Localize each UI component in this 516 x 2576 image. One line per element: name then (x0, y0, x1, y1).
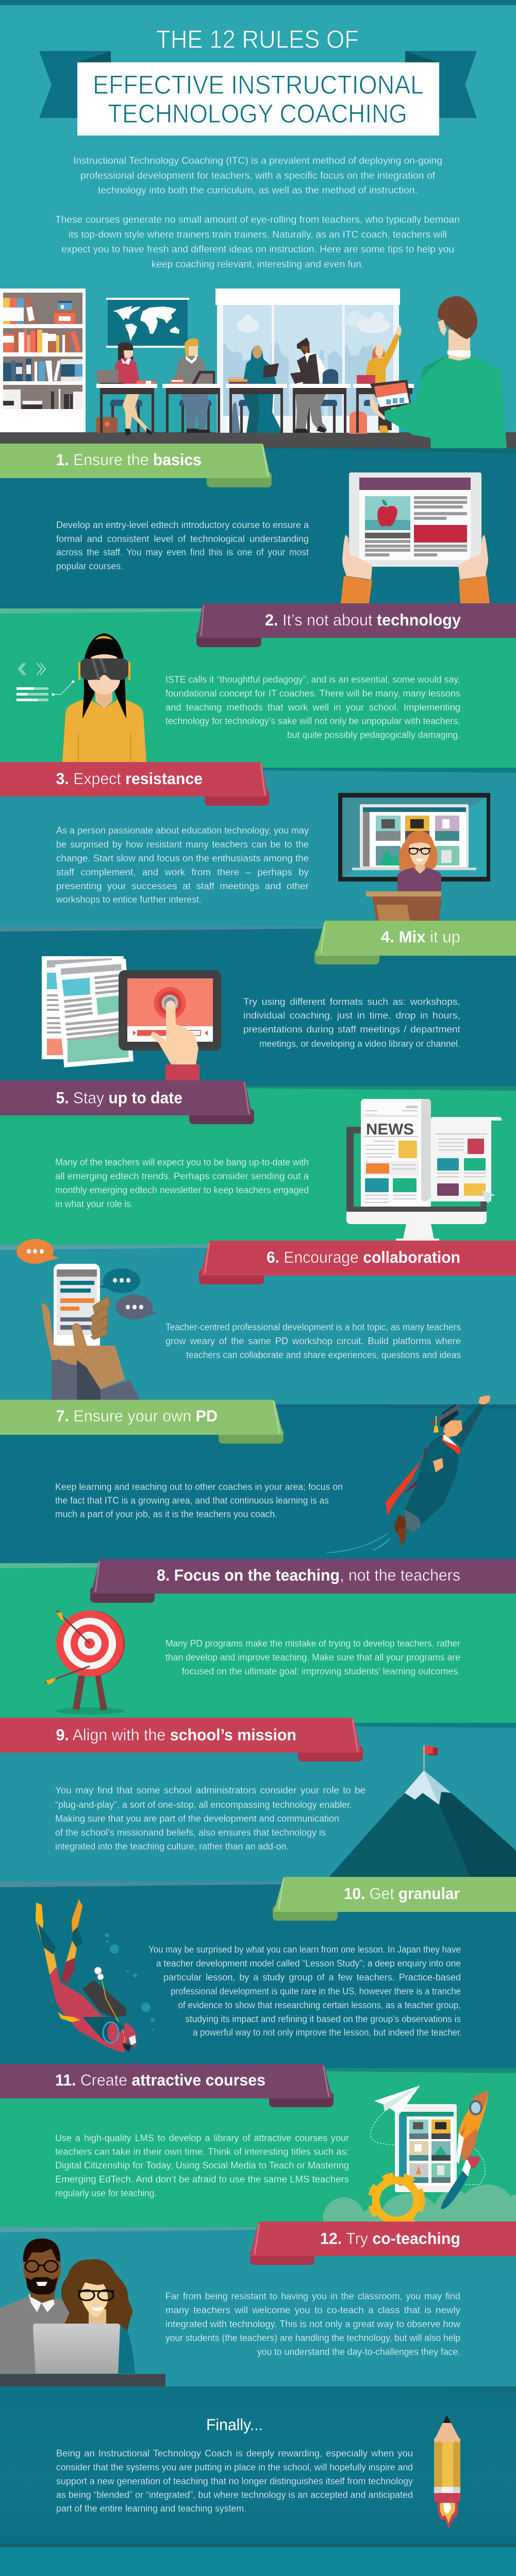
panel: finally (0, 2386, 516, 2544)
ribbon banner with main title (39, 51, 477, 135)
panel: rule 8 (0, 1559, 516, 1728)
body text: Use a high-quality LMS to develop a library of attractive courses your (55, 2133, 349, 2143)
chat bubble grey (115, 1295, 157, 1319)
body text: Emerging EdTech. And don’t be afraid to use the same LMS teachers (55, 2174, 349, 2184)
woman (61, 2259, 135, 2374)
ribbon heading: 11. create attractive courses: 11. Create attractive courses (55, 2071, 265, 2089)
body text: presenting your successes at staff meetings and other (56, 881, 309, 891)
body text: the fact that ITC is a growing area, and that continuous learning is as (55, 1495, 329, 1505)
panel: rule 4 (0, 921, 516, 1092)
body text: and teaching methods that work well in your school. Implementing (165, 702, 460, 713)
illustration: archery target with arrows (45, 1611, 125, 1715)
intro text: technology into both the curriculum, as well as the method of instruction. (98, 185, 418, 196)
intro text: Instructional Technology Coaching (ITC) is a prevalent method of deploying on-going (73, 156, 442, 166)
body text: formal and consistent level of technological understanding (56, 534, 309, 544)
illustration: mountain with flag (329, 1745, 516, 1877)
ribbon banner with main title: TECHNOLOGY COACHING (108, 99, 407, 128)
person: man with tablet (171, 338, 215, 384)
illustration: flying graduate in cape (327, 1396, 490, 1553)
man (0, 2239, 72, 2374)
body text (165, 2291, 461, 2357)
panel: rule 3 (0, 762, 516, 933)
person: student raising hand (357, 325, 402, 384)
body text: grow weary of the same PD workshop circuit. Build platforms where (165, 1336, 461, 1346)
body text: of the school’s missionand beliefs, also ensures that technology is (55, 1827, 326, 1838)
ribbon banner with main title: EFFECTIVE INSTRUCTIONAL (93, 70, 424, 99)
heading: finally: Finally... (206, 2415, 263, 2434)
body text: You may find that some school administrators consider your role to be (55, 1785, 365, 1795)
ribbon heading: 8. focus on the teaching: 8. Focus on the teaching, not the teachers (157, 1566, 460, 1584)
illustration: scuba diver with bubbles (36, 1899, 155, 2053)
body text: “plug-and-play”, a sort of one-stop, all encompassing technology enabler. (55, 1800, 352, 1810)
body text: Many PD programs make the mistake of trying to develop teachers, rather (165, 1638, 460, 1649)
panel: rule 10 (0, 1877, 516, 2073)
body text: popular courses. (56, 561, 123, 571)
body text: a powerful way to not only improve the lesson, but indeed the teacher. (193, 2027, 462, 2038)
body text: Keep learning and reaching out to other coaches in your area; focus on (55, 1482, 343, 1492)
ribbon heading: 2. it's not about technology (196, 603, 516, 647)
intro text (55, 156, 460, 270)
laptop (33, 2324, 120, 2374)
body text: change. Start slow and focus on the enthusiasts among the (56, 853, 309, 863)
body text: across the staff. You may even find this is one of your most (56, 547, 309, 557)
illustration: video tablet and documents (42, 956, 221, 1080)
ribbon heading: 3. expect resistance: 3. Expect resistance (56, 769, 203, 788)
ribbon heading: 11. create attractive courses (0, 2064, 334, 2107)
body text: Making sure that you are part of the development and communication (55, 1814, 339, 1824)
body text (55, 2133, 349, 2198)
ribbon heading: 5. stay up to date: 5. Stay up to date (56, 1088, 182, 1107)
panel: intro header (0, 0, 516, 448)
ribbon heading: 6. encourage collaboration (199, 1241, 516, 1284)
body text: integrated with technology. This is not only a great way to observe how (165, 2319, 461, 2329)
intro text: These courses generate no small amount of eye-rolling from teachers, who typically bemoan (55, 214, 460, 226)
body text: professional development is quite rare in the US, however there is a tranche (171, 1986, 461, 1996)
body text: Many of the teachers will expect you to be bang up-to-date with (55, 1157, 309, 1167)
panel: footer (0, 2544, 516, 2576)
body text: you to understand the day-to-challenges they face. (257, 2347, 460, 2357)
body text: workshops to entice further interest. (56, 894, 202, 905)
body text: Far from being resistant to having you in the classroom, you may find (165, 2291, 460, 2301)
body text (243, 996, 460, 1049)
body text: meetings, or developing a video library or channel. (259, 1039, 460, 1049)
window with skyline (215, 289, 400, 433)
body text (55, 1482, 343, 1519)
body text: teachers can collaborate and share experiences, questions and ideas (186, 1350, 461, 1360)
gear (370, 2175, 423, 2226)
body text: in what your role is. (55, 1199, 134, 1209)
body text: Try using different formats such as: workshops, (243, 996, 460, 1007)
body text: much a part of your job, as it is the teachers you coach. (55, 1509, 277, 1519)
body text: Develop an entry-level edtech introductory course to ensure a (56, 520, 309, 530)
ribbon heading: 12. try co-teaching: 12. Try co-teaching (320, 2229, 460, 2247)
body text: but quite possibly pedagogically damaging. (287, 730, 460, 740)
course tablet (395, 2104, 457, 2192)
body text: teachers can take in their own time. Think of interesting titles such as: (55, 2146, 349, 2157)
body text (56, 825, 309, 905)
coach with tablet (370, 296, 507, 448)
illustration: newspaper on monitor (346, 1099, 502, 1241)
body text: many teachers will welcome you to co-teach a class that is newly (165, 2305, 460, 2315)
ribbon heading: 4. mix it up: 4. Mix it up (381, 927, 460, 946)
clouds (323, 2184, 516, 2241)
ribbon heading: 1. ensure the basics (0, 444, 272, 487)
body text: support a new generation of teaching that no longer distinguishes itself from technology (56, 2476, 413, 2486)
body text: regularly use for teaching. (55, 2188, 157, 2198)
body text: studying its impact and refining it based on the group’s observations is (186, 2014, 461, 2024)
ribbon heading: 4. mix it up (314, 921, 516, 964)
body text: particular lesson, by a study group of a few teachers. Practice-based (163, 1972, 461, 1982)
panel: rule 11 (0, 2064, 516, 2241)
panel: rule 2 (0, 603, 516, 773)
illustration: newspaper on monitor: NEWS (366, 1120, 414, 1138)
body text: of evidence to show that researching certain lessons, as a teacher group, (178, 2000, 461, 2010)
person: woman in hijab (228, 345, 279, 384)
body text (55, 1785, 365, 1852)
body text (165, 1638, 460, 1676)
panel: rule 7 (0, 1396, 516, 1569)
body text (55, 1157, 309, 1209)
ribbon heading: 10. get granular: 10. Get granular (344, 1884, 460, 1903)
body text (56, 2448, 413, 2514)
panel: rule 5 (0, 1080, 516, 1251)
body text: than develop and improve teaching. Make sure that all your programs are (165, 1652, 460, 1663)
body text: monthly emerging edtech newsletter to keep teachers engaged (55, 1185, 309, 1195)
illustration: classroom (0, 289, 516, 448)
body text: Teacher-centred professional development is a hot topic, as many teachers (165, 1322, 461, 1332)
body text: integrated into the teaching culture, rather than an add-on. (55, 1841, 289, 1852)
ribbon heading: 9. align with the school's mission (0, 1718, 363, 1761)
ribbon heading: 6. encourage collaboration: 6. Encourage collaboration (267, 1248, 460, 1266)
paint brush (441, 2156, 479, 2209)
paper plane (374, 2086, 420, 2115)
ribbon heading: 7. ensure your own pd (0, 1400, 284, 1444)
illustration: course tablet with rocket, gear and brush (323, 2086, 516, 2241)
body text (148, 1944, 462, 2038)
illustration: presenter at screen with podium (338, 793, 490, 921)
chat bubble orange (16, 1239, 59, 1264)
person: woman with laptop (97, 342, 155, 384)
illustration: hands holding tablet (341, 472, 490, 603)
intro text: keep coaching relevant, interesting and even fun. (152, 259, 364, 270)
body text: staff complement, and work from there – perhaps by (56, 867, 309, 877)
illustration: woman with vr headset (16, 633, 146, 762)
body text: As a person passionate about education technology, you may (56, 825, 309, 836)
body text: be surprised by how resistant many teachers can be to the (56, 839, 309, 850)
body text: presentations during staff meetings / department (243, 1024, 460, 1035)
body text: a teacher development model called “Lesson Study”; a deep enquiry into one (156, 1958, 461, 1969)
body text: ISTE calls it “thoughtful pedagogy”, and is an essential, some would say, (165, 674, 460, 685)
body text: part of the entire learning and teaching system. (56, 2503, 246, 2514)
ribbon heading: 7. ensure your own pd: 7. Ensure your own PD (56, 1406, 218, 1425)
intro text: professional development for teachers, with a specific focus on the integration of (80, 171, 436, 181)
body text: all emerging edtech trends. Perhaps consider sending out a (55, 1171, 309, 1181)
body text: consider that the systems you are putting in place in the school, will hopefully inspire and (56, 2462, 413, 2472)
student desks and chairs (96, 384, 414, 436)
body text (165, 1322, 461, 1360)
title: the 12 rules of: THE 12 RULES OF (156, 26, 359, 54)
panel: rule 6 (0, 1239, 516, 1410)
panel: rule 9 (0, 1718, 516, 1888)
body text: individual coaching, just in time, drop in hours, (243, 1010, 460, 1021)
ribbon heading: 10. get granular (273, 1877, 516, 1921)
ribbon heading: 3. expect resistance (0, 762, 269, 806)
rocket (456, 2091, 488, 2164)
body text (165, 674, 460, 740)
chat bubble teal (99, 1268, 140, 1293)
panel: rule 1 (0, 444, 516, 613)
person: man in vest (290, 337, 338, 384)
panel: rule 12 (0, 2222, 516, 2392)
intro text: expect you to have fresh and different ideas on instruction. Here are some tips to help you (61, 244, 454, 255)
illustration: hand holding phone with chat bubbles (16, 1239, 157, 1400)
ribbon heading: 2. it's not about technology: 2. It’s not about technology (265, 611, 461, 629)
body text: as being “blended” or “integrated”, but where technology is an accepted and anticipated (56, 2489, 413, 2500)
ribbon heading: 12. try co-teaching (250, 2222, 516, 2265)
vr data graphics (16, 663, 74, 701)
body text (56, 520, 309, 571)
ribbon heading: 9. align with the school's mission: 9. Align with the school’s mission (56, 1725, 296, 1744)
body text: technology for technology’s sake will not only be unpopular with teachers, (165, 716, 460, 726)
body text: You may be surprised by what you can learn from one lesson. In Japan they have (148, 1944, 461, 1955)
body text: focused on the ultimate goal: improving students’ learning outcomes. (182, 1666, 460, 1676)
ribbon heading: 1. ensure the basics: 1. Ensure the basics (56, 450, 202, 469)
illustration: pencil rocket (434, 2415, 460, 2529)
body text: Digital Citizenship for Today, Using Social Media to Teach or Mastering (55, 2160, 349, 2171)
ribbon heading: 5. stay up to date (0, 1080, 254, 1124)
body text: Being an Instructional Technology Coach is deeply rewarding, especially when you (56, 2448, 413, 2459)
wall map (106, 298, 189, 348)
intro text: its top-down style where trainers train trainers. Naturally, as an ITC coach, teachers will (69, 230, 447, 240)
ribbon heading: 8. focus on the teaching (90, 1559, 516, 1603)
bookcase (0, 289, 86, 432)
illustration: co-teachers with laptop (0, 2239, 165, 2386)
body text: your students (the teachers) are handling the technology, but will also help (165, 2333, 460, 2343)
body text: foundational concept for IT coaches. There will be many, many lessons (165, 688, 460, 699)
